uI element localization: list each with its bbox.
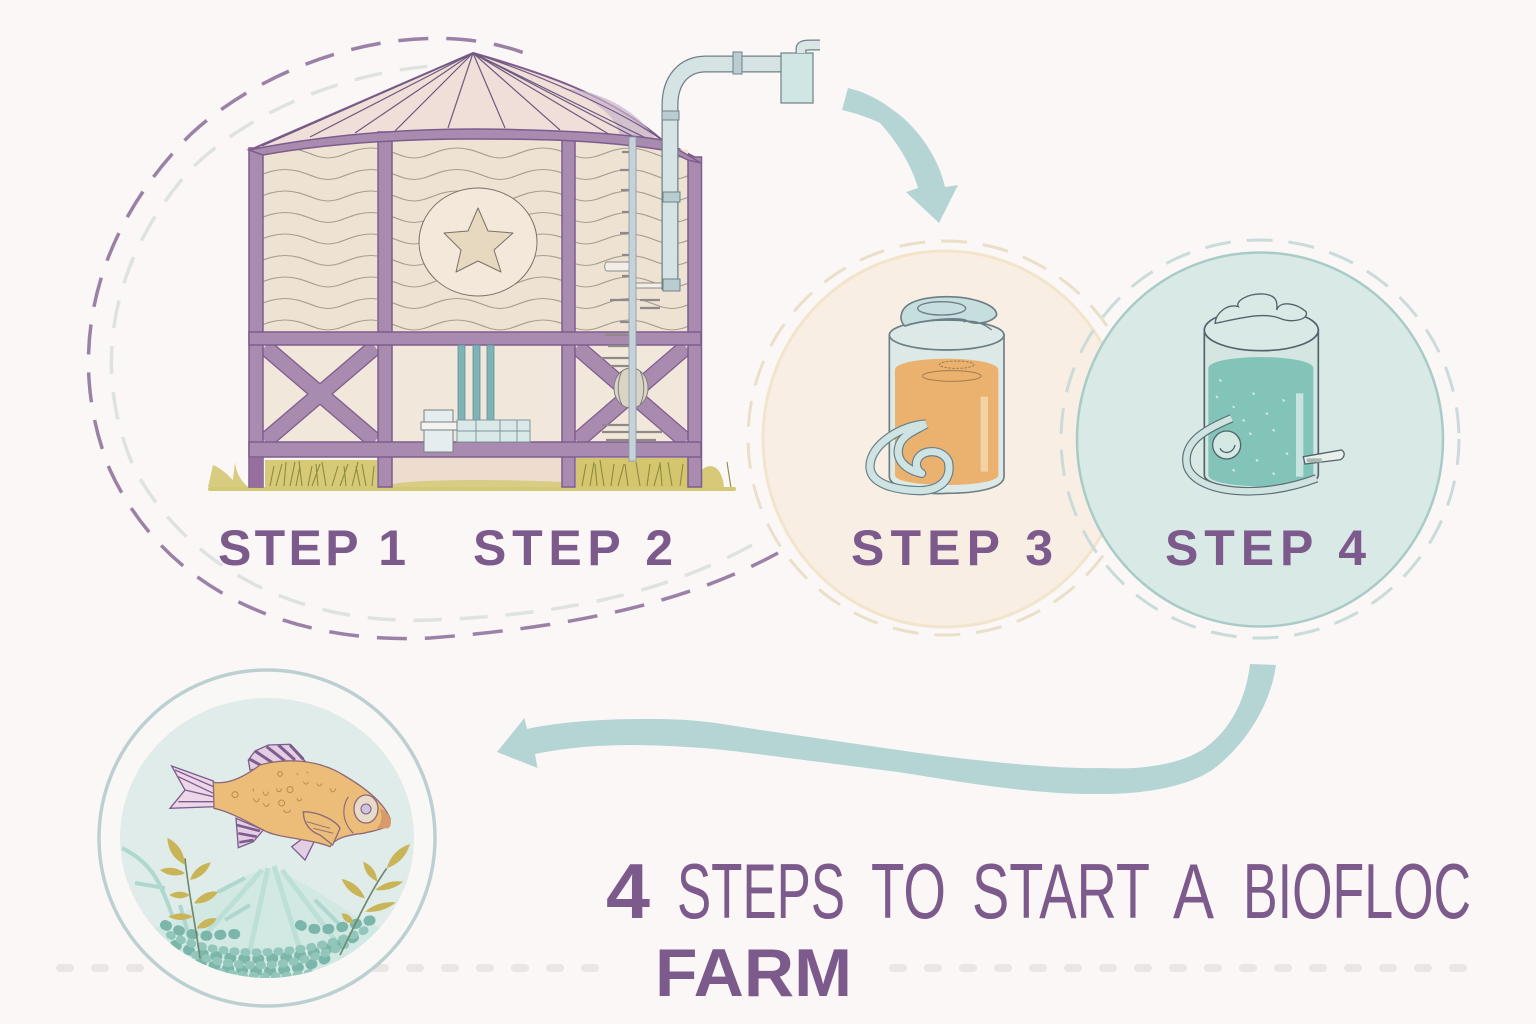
aquatic plants [121, 846, 380, 978]
label: step 3: STEP 3 [851, 520, 1053, 576]
step 4 circle [1061, 240, 1459, 638]
fish circle [99, 670, 435, 1006]
title line 1: START [972, 847, 1150, 935]
water disc [120, 698, 414, 978]
title line 1: STEPS [677, 847, 845, 935]
jar: step 4 [1186, 294, 1344, 491]
grass [208, 458, 736, 491]
wall panels [263, 135, 688, 487]
decorative dashed path: outer purple [88, 38, 778, 639]
title line 1: A [1173, 847, 1214, 935]
step 3 circle [748, 241, 1142, 635]
label: step 2: STEP 2 [473, 520, 673, 576]
arrow: step 4 to fish [497, 664, 1276, 794]
roof [250, 53, 700, 160]
arrow: tank to step 3 [842, 88, 958, 223]
decorative dashed path: inner grey [111, 65, 752, 620]
dotted baseline [60, 964, 1472, 972]
fish illustration [99, 670, 435, 1006]
jar: step 3 [870, 297, 1004, 494]
title line 1: TO [871, 847, 946, 935]
water pipe and header box [662, 45, 820, 291]
star emblem [419, 188, 537, 296]
frame [249, 129, 702, 487]
label: step 1: STEP 1 [218, 520, 406, 576]
fish [170, 744, 391, 860]
tank structure [208, 45, 820, 491]
title line 1: 4 [606, 847, 650, 935]
X braces [265, 347, 686, 441]
label: step 4: STEP 4 [1165, 520, 1366, 576]
gauge rod with rungs and valve [600, 137, 662, 461]
bottom pipes and pump [421, 345, 530, 452]
title line 2: FARM [655, 935, 852, 1011]
olive sprigs [160, 838, 410, 958]
title line 1 [606, 847, 1471, 935]
